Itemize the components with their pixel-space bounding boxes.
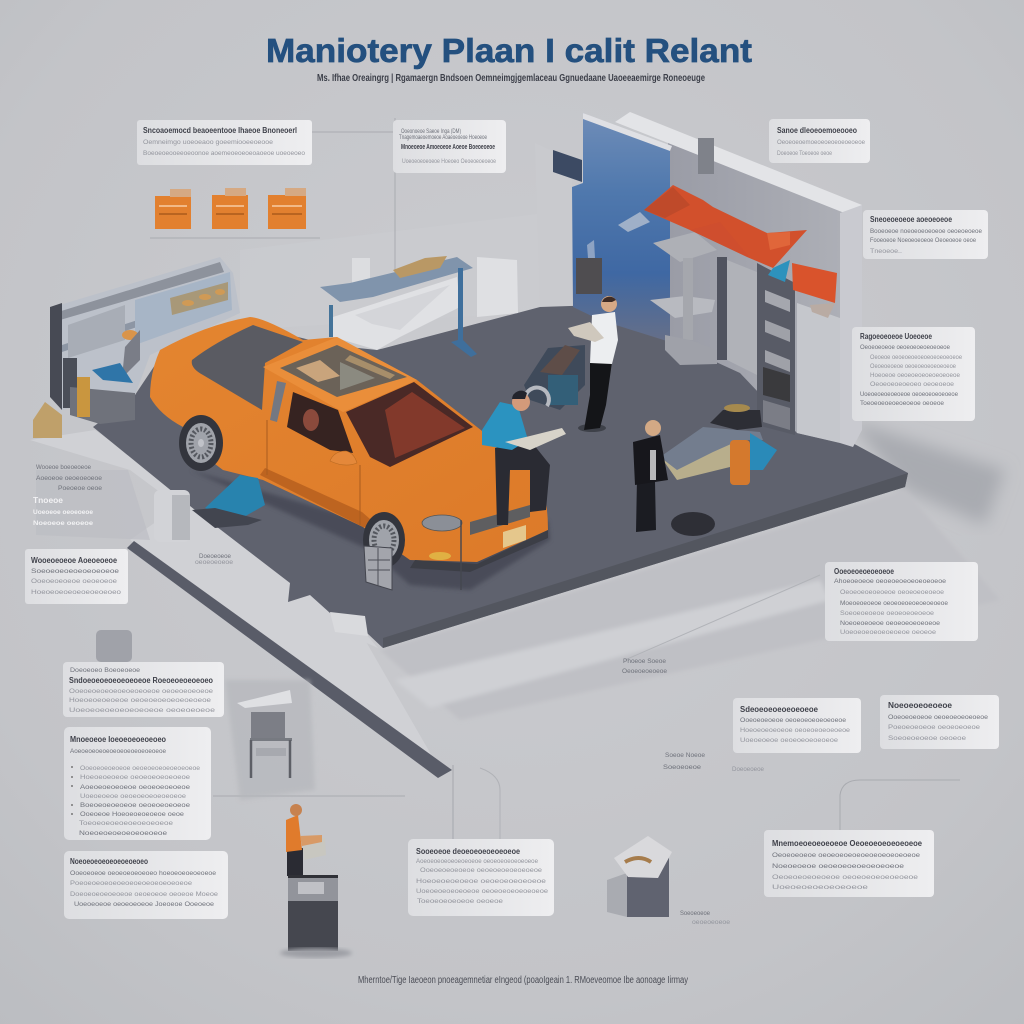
door column left — [727, 260, 757, 375]
floating label: ledge caption: Doeoeoeoe — [199, 553, 231, 560]
callout: right pair right: Ooeoeoeoeoe oeoeoeoeoeoeoe — [888, 714, 988, 721]
callout: top left: Oemneimgo uoeoeaoo goeemiooeeoeooe — [143, 139, 273, 146]
rear wheel — [179, 415, 223, 471]
wall tank — [576, 240, 602, 294]
callout: top center: Tnagemoaeoemoeoe Aoaeoeoeoe Hoeoeoe — [399, 134, 487, 141]
floating label: box — [680, 910, 730, 926]
arm small parts — [618, 212, 650, 232]
wall bracket — [553, 150, 582, 182]
rear window — [270, 381, 286, 422]
callout: right upper: Sneoeoeoeoe aoeoeoeoe — [870, 215, 952, 224]
floating label: left ledge — [33, 464, 102, 527]
callout: bottom center: Aoeoeoeoeoeoeoeoeoe oeoeoeoeoeoeoeoe — [416, 858, 538, 865]
floating label: mid-right: Soeoeoeoe — [663, 764, 701, 771]
callout: bottom center: Ooeoeoeoeoeoe oeoeoeoeoeoeoeoe — [420, 867, 542, 874]
callout: right pair left: Hoeoeoeoeoeoe oeoeoeoeoeoeoe — [740, 727, 850, 734]
callout: bottom right: Oeoeoeoeoeoeoe oeoeoeoeoeoeoeoe — [772, 874, 918, 881]
callout: right lower list: Oeoeoeoeoeoeoe oeoeoeoeoeoe — [840, 589, 944, 596]
callout: left upper wide: Hoeoeoeoeoeoe oeoeoeoeoeoeoeoeoe — [69, 697, 211, 704]
callout: bottom right: Mnemoeoeoeoeoeoe Oeoeoeoeoeoeoeoe — [772, 839, 923, 848]
callout: left list: Aoeoeoeoeoeoeoeoeoeoeoeoeoe — [70, 748, 166, 755]
callout: bottom left: Uoeoeoeoe oeoeoeoeoe Joeoeoe Ooeoeoe — [74, 901, 214, 908]
callout: bottom left — [64, 851, 228, 919]
callout: left small: Ooeoeoeoeoe oeoeoeoe — [31, 578, 117, 585]
subtitle: Ms. Ifhae Oreaingrg | Rgamaergn Bndsoen Oemneimgjgemlaceau Ggnuedaane Uaoeeaemirge Roneoeuge — [317, 73, 705, 84]
footer caption: Mherntoe/Tige Iaeoeon pnoeagemnetiar eIngeod (poaoIgeain 1. RMoeveomoe Ibe aonoage Iirmay — [358, 975, 688, 986]
roof panel — [280, 345, 407, 397]
callout: left list: Ooeoeoeoeoeoe oeoeoeoeoeoeoeoeoe — [80, 765, 200, 772]
callout: right lower list: Noeoeoeoeoe oeoeoeoeoeoeoe — [840, 620, 940, 627]
callout: right middle list: Oeoeoeoeoe oeoeoeoeoeoeoeoe — [870, 363, 956, 370]
floating label: center: Phoeoe Soeoe — [623, 658, 666, 665]
workbench left leg — [329, 305, 333, 337]
callout: left upper wide: Ooeoeoeoeoeoeoeoeoeoe oeoeoeoeoeoe — [69, 688, 213, 695]
callout: bottom right — [764, 830, 934, 897]
callout: right pair right: Poeoeoeoeoe oeoeoeoeoe — [888, 724, 980, 731]
floating label: center — [622, 658, 667, 675]
cabinet — [280, 875, 352, 958]
callout: left upper wide — [63, 662, 224, 717]
bed cover — [192, 325, 303, 410]
workbench tools — [393, 256, 447, 278]
car shadow — [190, 470, 550, 590]
round shelf unit — [650, 232, 727, 365]
callout: left list: Mnoeoeoe Ioeoeoeoeoeoeo — [70, 735, 166, 744]
floor platform — [93, 305, 908, 648]
lower sill shade — [260, 468, 378, 527]
callout: bottom center: Hoeoeoeoeoeoe oeoeoeoeoeoeoe — [416, 878, 546, 885]
callout: top left: Boeoeoeooeeoeoonoe aoemeoeoeoeoaoeoe uoeoeoeo — [143, 150, 305, 157]
step block — [330, 612, 368, 636]
callout: right middle list: Hoeoeoe oeoeoeoeoeoeoeoeoe — [870, 372, 960, 379]
callout: left small: Soeoeoeoeoeoeoeoeoe — [31, 568, 119, 575]
callout: right pair left: Sdeoeoeoeoeoeoeoe — [740, 705, 819, 714]
windshield — [346, 382, 473, 467]
door panel — [797, 303, 840, 443]
floating label: left ledge: Noeoeoe oeoeoe — [33, 520, 93, 527]
callout: bottom center — [408, 839, 554, 916]
callout: bottom left: Doeoeoeoeoeoeoe oeoeoeoe oeoeoe Moeoe — [70, 891, 218, 898]
callout: right lower list: Ooeoeoeoeoeoeoe — [834, 567, 894, 576]
man in white shirt — [568, 296, 618, 432]
callout: left list: Uoeoeoeoe oeoeoeoeoeoeoeoe — [80, 793, 186, 800]
floating label: mid-right: Doeoeoeoe — [732, 766, 764, 773]
callout: right upper: Tneoeoe.. — [870, 248, 902, 255]
workbench right leg — [451, 268, 477, 357]
callout: right lower list — [825, 562, 978, 641]
fog lamp — [429, 552, 451, 560]
callout: left small: Hoeoeoeoeoeoeoeoeoeo — [31, 589, 121, 596]
callout: top center — [393, 120, 506, 173]
floor tire — [671, 512, 715, 536]
callout: bottom left: Poeoeoeoeoeoeoeoeoeoeoeoeoeoe — [70, 880, 192, 887]
callout: top right — [769, 119, 870, 163]
callout: left list: Ooeoeoe Hoeoeoeoeoeoe oeoe — [80, 811, 184, 818]
bay back wall — [668, 130, 850, 445]
callout: right middle list: Oeoeoeoeoeoeo oeoeoeoe — [870, 381, 954, 388]
red hoist — [644, 185, 837, 318]
callout: left list: Hoeoeoeoeoe oeoeoeoeoeoeoe — [80, 774, 190, 781]
callout: right pair left — [733, 698, 861, 753]
floating label: mid-right: Soeoe Noeoe — [665, 752, 705, 759]
engine machine — [660, 427, 777, 485]
callout: bottom center: Uoeoeoeoeoeoeoe oeoeoeoeoeoeoeoe — [416, 888, 548, 895]
callout: left upper wide: Sndoeoeoeoeoeoeoeoe Roeoeoeoeoeoeo — [69, 676, 213, 685]
back room shade — [213, 118, 1005, 840]
back machine: workbench — [320, 256, 518, 357]
repair bay — [553, 112, 862, 447]
floating label: mid-right — [663, 752, 764, 773]
front lip — [410, 530, 548, 572]
floating label: ledge caption: oeoeoeoeoe — [195, 559, 233, 566]
callout: right lower list: Ahoeoeoeoe oeoeoeoeoeoeoeoeoe — [834, 578, 946, 585]
white roof beam — [615, 112, 862, 216]
callout: right pair right — [880, 695, 999, 749]
callout: right middle list: Oeoeoeoeoe oeoeoeoeoeoeoeoe — [860, 344, 950, 351]
man in blue on hood — [482, 391, 566, 525]
side window — [287, 392, 353, 453]
wire cart — [364, 546, 392, 590]
upper beam — [583, 113, 672, 151]
floating label: left ledge: Aoeoeoe oeoeoeoeoe — [36, 475, 102, 482]
callout: right middle list: Ragoeoeoeoe Uoeoeoe — [860, 332, 932, 341]
platform front lip — [383, 473, 908, 648]
floating label: box: oeoeoeoeoe — [692, 919, 730, 926]
callout: right middle list: Uoeoeoeoeoeoeoe oeoeoeoeoeoeoe — [860, 391, 958, 398]
callout: right pair left: Ooeoeoeoeoe oeoeoeoeoeoeoeoe — [740, 717, 846, 724]
icon: orange folders — [150, 188, 320, 238]
man at cabinet — [286, 804, 326, 876]
blue wall — [572, 113, 670, 342]
workbench side cabinets — [477, 257, 518, 317]
callout: right middle list — [852, 327, 975, 421]
callout: top center: Ooeonoeoe Saeoe Inga (DM) — [401, 128, 461, 135]
workbench body — [333, 277, 460, 350]
callout: right upper: Fooeoeoe Noeoeoeoeoe Oeoeoeoe oeoe — [870, 237, 976, 244]
callout: right pair right: Noeoeoeoeoeoe — [888, 701, 953, 710]
callout: right upper: Booeoeoe noeoeoeoeoeoe oeoeoeoeoe — [870, 228, 982, 235]
callout: bottom left: Ooeoeoeoe oeoeoeoeoeoeo hoeoeoeoeoeoeoe — [70, 870, 216, 877]
front wheel — [363, 512, 405, 568]
floor: left stepped light ledge — [30, 430, 452, 778]
callout: right lower list: Uoeoeoeoeoeoeoeoe oeoeoe — [840, 629, 936, 636]
tall shelf unit — [757, 263, 795, 435]
callout: top center: Mnoeoeoe Amoeoeoe Aoeoe Boeoeoeoe — [401, 144, 495, 151]
callout: bottom center: Sooeoeoe deoeoeoeoeoeoeoe — [416, 847, 520, 856]
callout: left list: Aoeoeoeoeoeoe oeoeoeoeoeoe — [80, 784, 190, 791]
callout: left small: Wooeoeoeoe Aoeoeoeoe — [31, 556, 117, 565]
callout: top center: Uoeoeoeoeoeoe Hoeoeo Oeoeoeoeoeoe — [402, 158, 496, 165]
callout: left list: Boeoeoeoeoeoe oeoeoeoeoeoe — [80, 802, 190, 809]
title: Maniotery Plaan I calit Relant — [266, 32, 752, 69]
callout: right middle list: Toeoeoeoeoeoeoeoe oeoeoe — [860, 400, 944, 407]
callout: left upper wide: Doeoeoeo Boeoeoeoe — [70, 667, 140, 674]
callout: bottom right: Uoeoeoeoeoeoeoeoe — [772, 884, 869, 891]
man in black — [633, 420, 668, 532]
storage rack — [33, 257, 240, 438]
callout: left list: Noeoeoeoeoeoeoeoeoe — [79, 830, 167, 837]
floating label: left ledge: Poeoeoe oeoe — [58, 485, 102, 492]
callout: top left: Sncoaoemocd beaoeentooe Ihaeoe Bnoneoerl — [143, 126, 297, 135]
right wall column — [840, 205, 862, 447]
printer table — [225, 680, 315, 800]
callout: top right: Doeoeoe Toeoeoe oeoe — [777, 150, 832, 157]
floating label: center: Oeoeoeoeoeoe — [622, 668, 667, 675]
floating label: left ledge: Uoeoeoe oeoeoeoe — [33, 509, 93, 516]
tire stack / chair — [524, 345, 585, 410]
white drum — [154, 490, 190, 542]
floating label: box: Soeoeoeoe — [680, 910, 710, 917]
callout: bottom right: Noeoeoeoe oeoeoeoeoeoeoeoeoe — [772, 863, 904, 870]
callout: bottom left: Noeoeoeoeoeoeoeoeoeo — [70, 857, 148, 866]
callout: right pair left: Uoeoeoeoe oeoeoeoeoeoeoe — [740, 737, 838, 744]
callout: right lower list: Soeoeoeoeoe oeoeoeoeoeoe — [840, 610, 934, 617]
callout: top left — [137, 120, 312, 165]
callout: left list — [64, 727, 211, 840]
mirror — [330, 451, 357, 465]
callout: right upper — [863, 210, 988, 259]
headlight — [422, 515, 462, 531]
car — [150, 317, 550, 590]
callout: bottom right: Oeoeoeoeoe oeoeoeoeoeoeoeoeoeoeoeoe — [772, 852, 920, 859]
callout: left small — [25, 549, 128, 604]
callout: top right: Oeoeoeoemoeoeoeoeoeoeoeoe — [777, 139, 865, 146]
car body — [150, 317, 548, 562]
license plate — [503, 525, 526, 548]
roof — [263, 337, 417, 412]
callout: right lower list: Moeoeoeoeoe oeoeoeoeoeoeoeoeoe — [840, 600, 948, 607]
floating label: left ledge: Tnoeoe — [33, 496, 64, 505]
floating label: ledge caption — [195, 553, 233, 566]
callout: bottom center: Toeoeoeoeoeoe oeoeoe — [417, 898, 503, 905]
callout: top right: Sanoe dleoeoemoeooeo — [777, 126, 857, 135]
workbench top bar — [320, 257, 473, 302]
callout: right pair right: Soeoeoeoeoe oeoeoe — [888, 735, 966, 742]
callout: left upper wide: Uoeoeoeoeoeoeoeoeoe oeoeoeoeoe — [69, 707, 216, 714]
book box — [607, 836, 672, 917]
tire stack — [710, 404, 762, 430]
blue floor jack — [192, 475, 265, 528]
beam clamp — [698, 138, 714, 174]
floating label: left ledge: Wooeoe boeoeoeoe — [36, 464, 91, 471]
callout: left list: Toeoeoeoeoeoeoeoeoeoe — [79, 820, 173, 827]
grille — [470, 505, 530, 535]
callout: right middle list: Oeoeoe oeoeoeoeoeoeoeoeoeoeoe — [870, 354, 962, 361]
front wire frame — [460, 520, 462, 590]
left hazard bins — [96, 630, 132, 662]
door seam — [267, 420, 360, 525]
